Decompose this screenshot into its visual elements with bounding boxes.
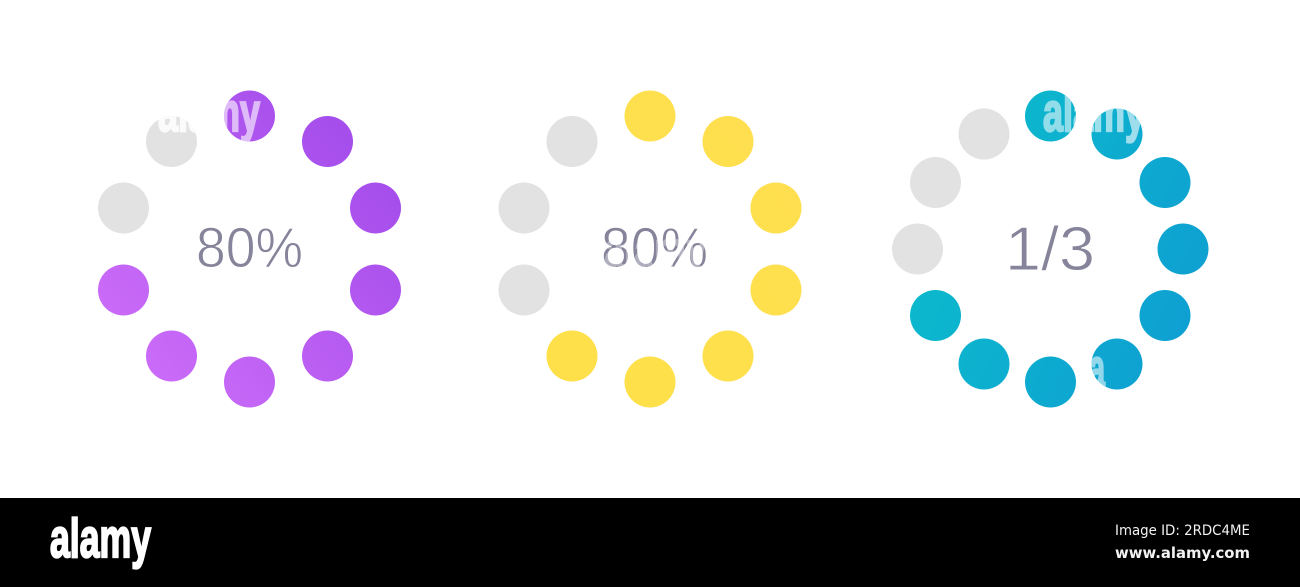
watermark fragment on purple dot: alamy bbox=[158, 81, 260, 143]
watermark fragment on first cyan dot: alamy bbox=[1043, 81, 1145, 143]
cyan ring value: 1/3 bbox=[1005, 215, 1095, 284]
purple ring empty dots bbox=[98, 116, 197, 234]
purple filled dots bbox=[98, 90, 401, 408]
yellow filled dots bbox=[546, 90, 802, 408]
cyan filled dots bbox=[910, 90, 1208, 408]
watermark over yellow ring value: alamy bbox=[604, 219, 706, 281]
panel: yellow 80% progress ring bbox=[498, 90, 802, 408]
cyan ring empty dots bbox=[892, 108, 1010, 274]
footer bar bbox=[0, 498, 1300, 587]
yellow ring value: 80% bbox=[601, 216, 708, 280]
watermark fragment on second cyan dot: alamy bbox=[1043, 81, 1145, 143]
alamy logo: alamy bbox=[50, 507, 151, 569]
yellow ring empty dots bbox=[498, 116, 598, 316]
website url: www.alamy.com bbox=[1115, 544, 1250, 562]
watermark fragment on lower cyan dot: a bbox=[1089, 337, 1105, 399]
panel: cyan 1/3 progress ring bbox=[892, 81, 1208, 408]
panel: purple 80% progress ring bbox=[98, 81, 401, 408]
image id: Image ID: 2RDC4ME bbox=[1115, 523, 1250, 539]
purple ring value: 80% bbox=[196, 216, 303, 280]
footer background bbox=[0, 498, 1300, 587]
watermark fragment on grey dot: alamy bbox=[158, 81, 260, 143]
